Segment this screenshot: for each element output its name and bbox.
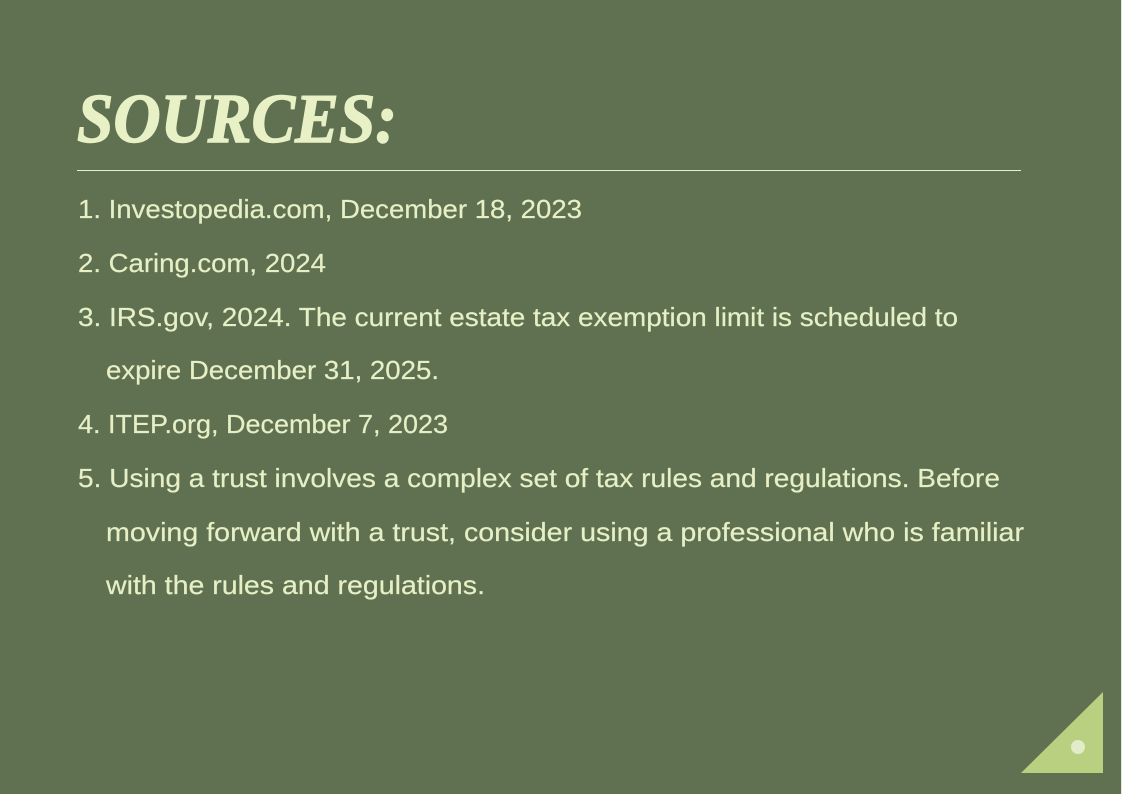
- source 4: 4. ITEP.org, December 7, 2023: [78, 409, 448, 439]
- icon: corner triangle with dot: [1021, 692, 1103, 773]
- source 5: with the rules and regulations.: [105, 570, 485, 600]
- source 3: 3. IRS.gov, 2024. The current estate tax exemption limit is scheduled to: [78, 302, 958, 332]
- title: SOURCES:: [77, 81, 397, 158]
- source 3: [78, 302, 958, 385]
- source 5: [78, 463, 1024, 600]
- source 3: expire December 31, 2025.: [106, 355, 439, 385]
- sources list: [78, 194, 1024, 600]
- source 1: 1. Investopedia.com, December 18, 2023: [78, 194, 582, 224]
- source 5: 5. Using a trust involves a complex set of tax rules and regulations. Before: [78, 463, 1000, 493]
- source 2: 2. Caring.com, 2024: [78, 248, 326, 278]
- source 5: moving forward with a trust, consider using a professional who is familiar: [106, 517, 1024, 547]
